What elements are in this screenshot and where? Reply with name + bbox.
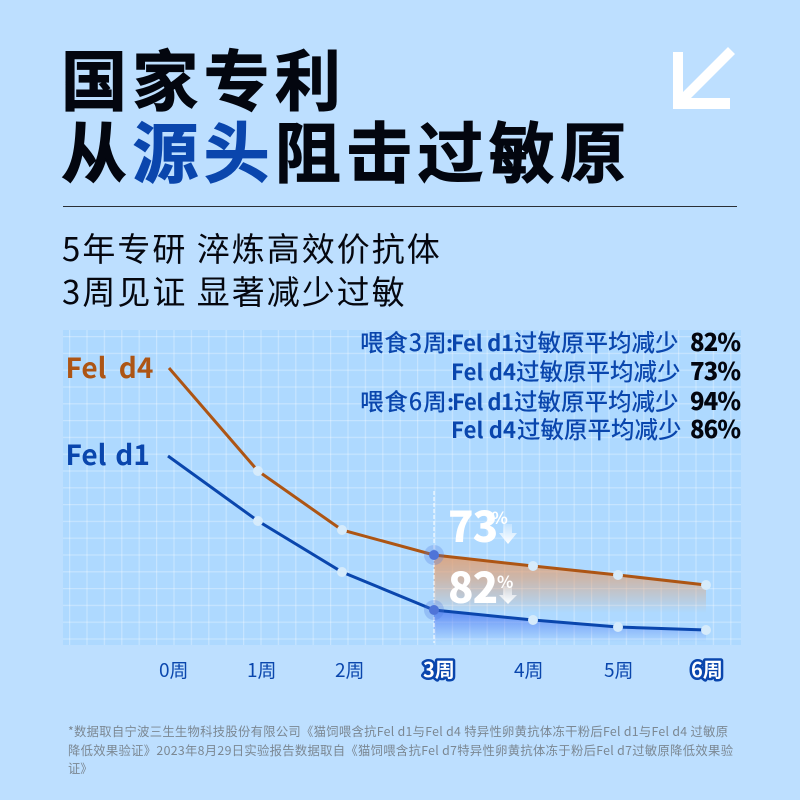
subtitle — [62, 223, 442, 314]
stat: week 6 Fel d1: 94% — [690, 382, 741, 417]
callout: 82%: % — [497, 568, 513, 593]
stat: week 6 Fel d1: 过敏原平均减少 — [514, 383, 678, 417]
title: 从源头阻击过敏原 — [61, 101, 631, 197]
x axis labels: 2周 — [335, 656, 365, 683]
stat: week 6 Fel d4: 过敏原平均减少 — [517, 411, 682, 445]
stat: week 6 Fel d4 — [451, 410, 741, 445]
stat: week 3 Fel d4: 过敏原平均减少 — [516, 353, 680, 387]
line: Fel d4 — [169, 368, 706, 585]
stat: week 3 Fel d1 — [360, 323, 741, 358]
subtitle: 5年专研 淬炼高效价抗体 — [62, 223, 442, 271]
stat: week 6 Fel d1 — [360, 382, 741, 417]
chart panel — [63, 330, 741, 645]
callout: 73%: 73 — [448, 494, 497, 555]
stat: week 6 Fel d4: 86% — [690, 410, 741, 445]
footnote: *数据取自宁波三生生物科技股份有限公司《猫饲喂含抗Fel d1与Fel d4 特异性卵黄抗体冻干粉后Fel d1与Fel d4 过敏原 — [68, 722, 728, 740]
line: Fel d1 — [168, 456, 706, 630]
x axis labels: 4周 — [514, 656, 544, 683]
stat: week 3 Fel d1: : — [446, 326, 453, 358]
data points — [253, 466, 711, 635]
stat: week 3 Fel d1: 喂食3周 — [360, 324, 448, 358]
subtitle: 3周见证 显著减少过敏 — [62, 266, 407, 314]
icon: arrow pointing down-left — [673, 47, 735, 109]
callout: 82%: 82 — [448, 555, 497, 616]
footnote: 降低效果验证》2023年8月29日实验报告数据取自《猫饲喂含抗Fel d7特异性卵黄抗体冻于粉后Fel d7过敏原降低效果验 — [68, 741, 733, 759]
area fill: Fel d4 reduction — [434, 555, 706, 613]
stat: week 6 Fel d1: 喂食6周 — [360, 383, 448, 417]
stat: week 3 Fel d1: Fel d1 — [451, 326, 514, 358]
stat: week 6 Fel d1: Fel d1 — [452, 385, 514, 417]
stat: week 3 Fel d4: Fel d4 — [451, 355, 516, 387]
stat: week 6 Fel d4: Fel d4 — [451, 413, 516, 445]
stat: week 6 Fel d1: : — [447, 385, 454, 417]
area fill: Fel d1 reduction — [434, 610, 706, 642]
footnote: 证》 — [68, 759, 93, 777]
title: 国家专利 — [61, 29, 346, 125]
highlighted points at week 3 — [424, 545, 444, 620]
label: Fel d4: Fel d4 — [66, 347, 153, 387]
stats text block — [360, 323, 741, 445]
footnote — [68, 722, 733, 777]
stat: week 3 Fel d4 — [451, 352, 741, 387]
label: Fel d1: Fel d1 — [66, 434, 150, 474]
x axis labels: 5周 — [604, 656, 634, 683]
stat: week 3 Fel d1: 82% — [690, 323, 741, 358]
x axis labels: 1周 — [247, 656, 277, 683]
callout: 73%: % — [492, 504, 508, 529]
stat: week 3 Fel d4: 73% — [690, 352, 741, 387]
stat: week 3 Fel d1: 过敏原平均减少 — [514, 324, 678, 358]
highlighted axis label: 3周: 3周 — [423, 654, 455, 683]
title — [61, 29, 631, 197]
x axis labels: 0周 — [159, 656, 189, 683]
x axis labels — [159, 654, 723, 683]
highlighted axis label: 6周: 6周 — [691, 654, 723, 683]
